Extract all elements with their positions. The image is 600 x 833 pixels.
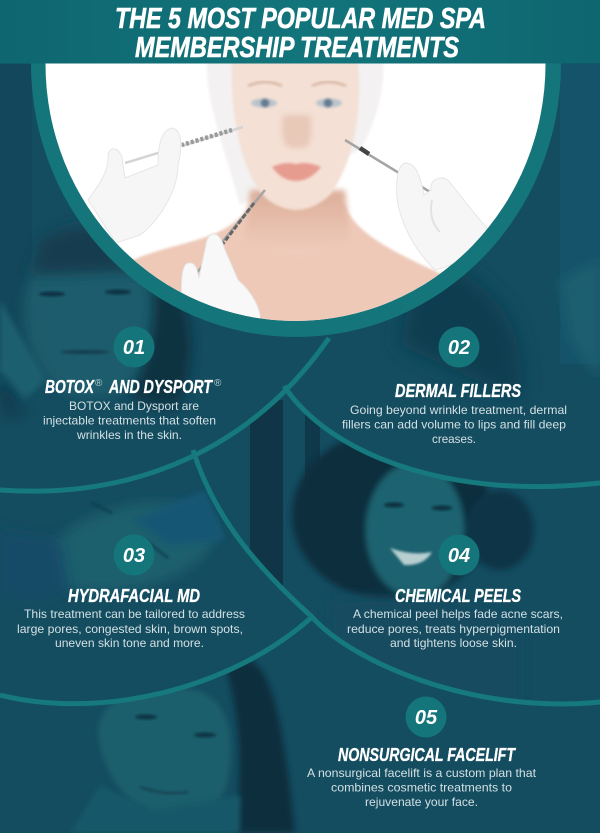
number badge 02 [438,326,480,368]
body 05: combines cosmetic treatments to [331,780,512,794]
towel [207,60,383,205]
heading 01: BOTOX [45,377,95,397]
divider arcs [0,338,600,704]
body 01 [43,399,216,442]
body 01: BOTOX and Dysport are [69,399,199,413]
body 04: reduce pores, treats hyperpigmentation [347,622,560,636]
glove: left hand [88,128,181,243]
heading 01: ® [95,378,103,389]
glove: right hand [397,163,487,270]
photo: woman 1 under panel 01 [0,64,600,416]
number badge 05: 05 [415,707,438,729]
body 05 [307,766,537,809]
body 01: wrinkles in the skin. [76,428,182,442]
body 05: rejuvenate your face. [365,795,478,809]
hero photo [40,60,560,330]
syringes [125,127,243,163]
body 02: fillers can add volume to lips and fill deep [342,418,566,432]
lips [272,163,321,181]
number badge 04 [438,534,480,576]
number badge 01: 01 [123,337,145,359]
item 02: dermal fillers [342,326,567,446]
number badge 04: 04 [448,545,470,567]
eyes [251,98,342,108]
body 04: and tightens loose skin. [390,636,517,650]
number badge 05 [406,696,446,738]
body 02: creases. [432,432,476,446]
body 04: A chemical peel helps fade acne scars, [353,607,563,621]
title [115,3,486,64]
title: THE 5 MOST POPULAR MED SPA [115,3,486,35]
banner [0,0,600,64]
heading 01: AND DYSPORT [108,377,214,397]
item 04: chemical peels [347,534,563,650]
face [232,60,359,210]
heading 04: CHEMICAL PEELS [395,586,521,606]
item 05: nonsurgical facelift [307,696,537,809]
body 02 [342,403,567,446]
nose shading [282,115,311,148]
photo: woman with dark hair under panel 05 [70,659,295,833]
number badge 01 [114,326,154,368]
heading 03: HYDRAFACIAL MD [68,586,200,606]
title: MEMBERSHIP TREATMENTS [135,32,459,64]
body 03 [17,607,245,650]
body 03: large pores, congested skin, brown spots, [17,622,243,636]
photo: woman with curly hair under panel 04 [250,400,535,600]
heading 01 [45,377,222,397]
item 03: hydrafacial md [17,534,245,650]
number badge 03: 03 [123,545,145,567]
heading 01: ® [214,378,222,389]
glove: bottom hand [181,234,260,322]
shoulders [132,205,442,321]
number badge 03 [114,534,154,576]
heading 05: NONSURGICAL FACELIFT [338,745,517,765]
body 03: uneven skin tone and more. [55,636,204,650]
body 03: This treatment can be tailored to address [24,607,245,621]
body 01: injectable treatments that soften [43,414,216,428]
body 02: Going beyond wrinkle treatment, dermal [350,403,567,417]
body 04 [347,607,563,650]
item 01: botox and dysport [43,326,222,442]
photo: face under panel 03 [12,491,224,593]
body 05: A nonsurgical facelift is a custom plan that [307,766,537,780]
heading 02: DERMAL FILLERS [395,381,521,401]
hero ring [31,0,561,337]
number badge 02: 02 [448,337,470,359]
